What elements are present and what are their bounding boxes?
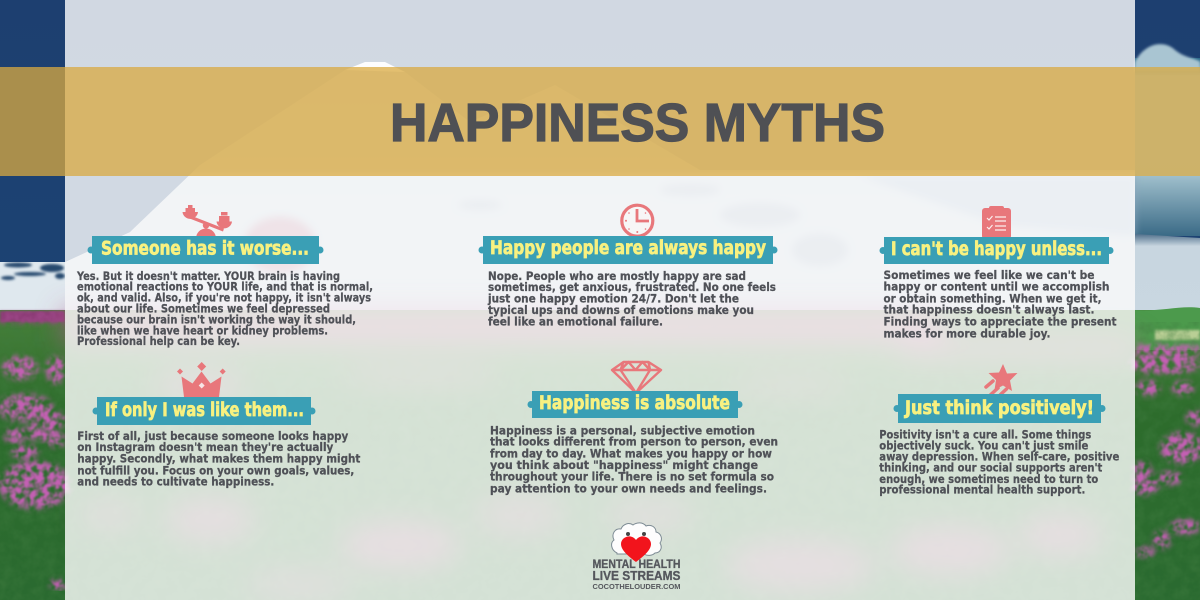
text block: i can't be happy unless [884,268,1117,340]
text block: someone has it worse: ok, and valid. Also, if you're not happy, it isn't always [77,291,371,305]
gold title band [0,67,1200,176]
icon: crown [177,362,226,400]
banner: happiness is absolute [528,391,742,418]
text block: i can't be happy unless: happy or content until we accomplish [884,280,1110,294]
text block: happiness is absolute: throughout your life. There is no set formula so [490,470,774,484]
icon: checklist clipboard [982,206,1011,239]
banner: i can't be happy unless [880,237,1114,264]
logo: mental health live streams [592,523,681,591]
logo text: COCOTHELOUDER.COM [592,584,681,591]
text block: someone has it worse: Yes. But it doesn't matter. YOUR brain is having [76,269,340,283]
text block: if only i was like them [77,429,361,489]
text block: someone has it worse: emotional reactions to YOUR life, and that is normal, [77,280,373,294]
panel: happiness is absolute [490,362,778,495]
banner: just think positively [894,394,1106,423]
text block: happy people are always happy: just one happy emotion 24/7. Don't let the [487,291,739,305]
text block: someone has it worse: Professional help can be key. [77,334,240,348]
text block: i can't be happy unless: that happiness doesn't always last. [884,302,1094,316]
icon: diamond [612,362,661,393]
text block: i can't be happy unless: makes for more durable joy. [884,326,1050,340]
text block: someone has it worse [76,269,373,348]
panel: i can't be happy unless [880,206,1117,340]
flowers on side strips [0,311,1200,591]
soft haze behind panel [65,312,1135,600]
text block: if only i was like them: on Instagram doesn't mean they're actually [77,440,334,454]
text block: someone has it worse: like when we have heart or kidney problems. [77,323,328,337]
icon: cloud with heart [612,523,661,562]
banner: someone has it worse: Someone has it worse... [101,238,309,260]
logo text: MENTAL HEALTH [592,559,680,571]
text block: if only i was like them: and needs to cultivate happiness. [77,475,274,489]
panel: just think positively [879,364,1119,497]
banner: if only i was like them: If only I was like them... [105,400,304,421]
text block: i can't be happy unless: Sometimes we feel like we can't be [884,268,1095,282]
text block: happiness is absolute: Happiness is a personal, subjective emotion [490,423,755,437]
text block: happiness is absolute: from day to day. What makes you happy or how [490,447,772,461]
text block: just think positively: away depression. When self-care, positive [879,449,1119,463]
text block: if only i was like them: First of all, just because someone looks happy [77,429,349,443]
logo text: LIVE STREAMS [592,569,680,583]
icon: clock [622,205,653,236]
text block: happiness is absolute: you think about "happiness" might change [490,458,758,472]
banner: happiness is absolute: Happiness is absolute [539,393,730,414]
text block: happy people are always happy: feel like an emotional failure. [488,315,663,329]
text block: if only i was like them: not fulfill you. Focus on your own goals, values, [77,463,354,477]
text block: just think positively: objectively suck. You can't just smile [879,438,1088,452]
text block: if only i was like them: happy. Secondly, what makes them happy might [77,451,361,465]
text block: happy people are always happy: Nope. People who are mostly happy are sad [488,269,746,283]
banner: someone has it worse [88,236,324,264]
text block: happiness is absolute [490,423,778,495]
panel: if only i was like them [77,362,361,489]
text block: happy people are always happy: typical ups and downs of emotions make you [488,303,754,317]
banner: happy people are always happy: Happy people are always happy [490,238,766,259]
text block: just think positively: thinking, and our social supports aren't [879,461,1103,475]
text block: happiness is absolute: pay attention to your own needs and feelings. [490,481,767,495]
text block: i can't be happy unless: Finding ways to appreciate the present [884,315,1117,329]
title: HAPPINESS MYTHS [390,93,885,153]
text block: just think positively [879,427,1119,497]
icon: shooting star [986,364,1018,398]
text block: someone has it worse: because our brain isn't working the way it should, [77,313,356,327]
text block: happy people are always happy: sometimes, get anxious, frustrated. No one feels [488,280,776,294]
banner: happy people are always happy [478,236,778,264]
text block: happy people are always happy [487,269,776,329]
text block: happiness is absolute: that looks different from person to person, even [490,435,778,449]
banner: i can't be happy unless: I can't be happy unless... [891,239,1102,260]
text block: i can't be happy unless: or obtain something. When we get it, [884,291,1102,305]
icon: balance scale [182,205,232,238]
text block: just think positively: enough, we sometimes need to turn to [879,472,1098,486]
banner: if only i was like them [92,397,316,425]
text block: someone has it worse: about our life. Sometimes we feel depressed [77,301,330,315]
text block: just think positively: professional mental health support. [879,483,1085,497]
panel: happy people are always happy [478,205,778,329]
logo text [592,559,681,591]
banner: just think positively: Just think positively! [903,398,1094,419]
text block: just think positively: Positivity isn't a cure all. Some things [879,427,1091,441]
panel: someone has it worse [76,205,373,348]
